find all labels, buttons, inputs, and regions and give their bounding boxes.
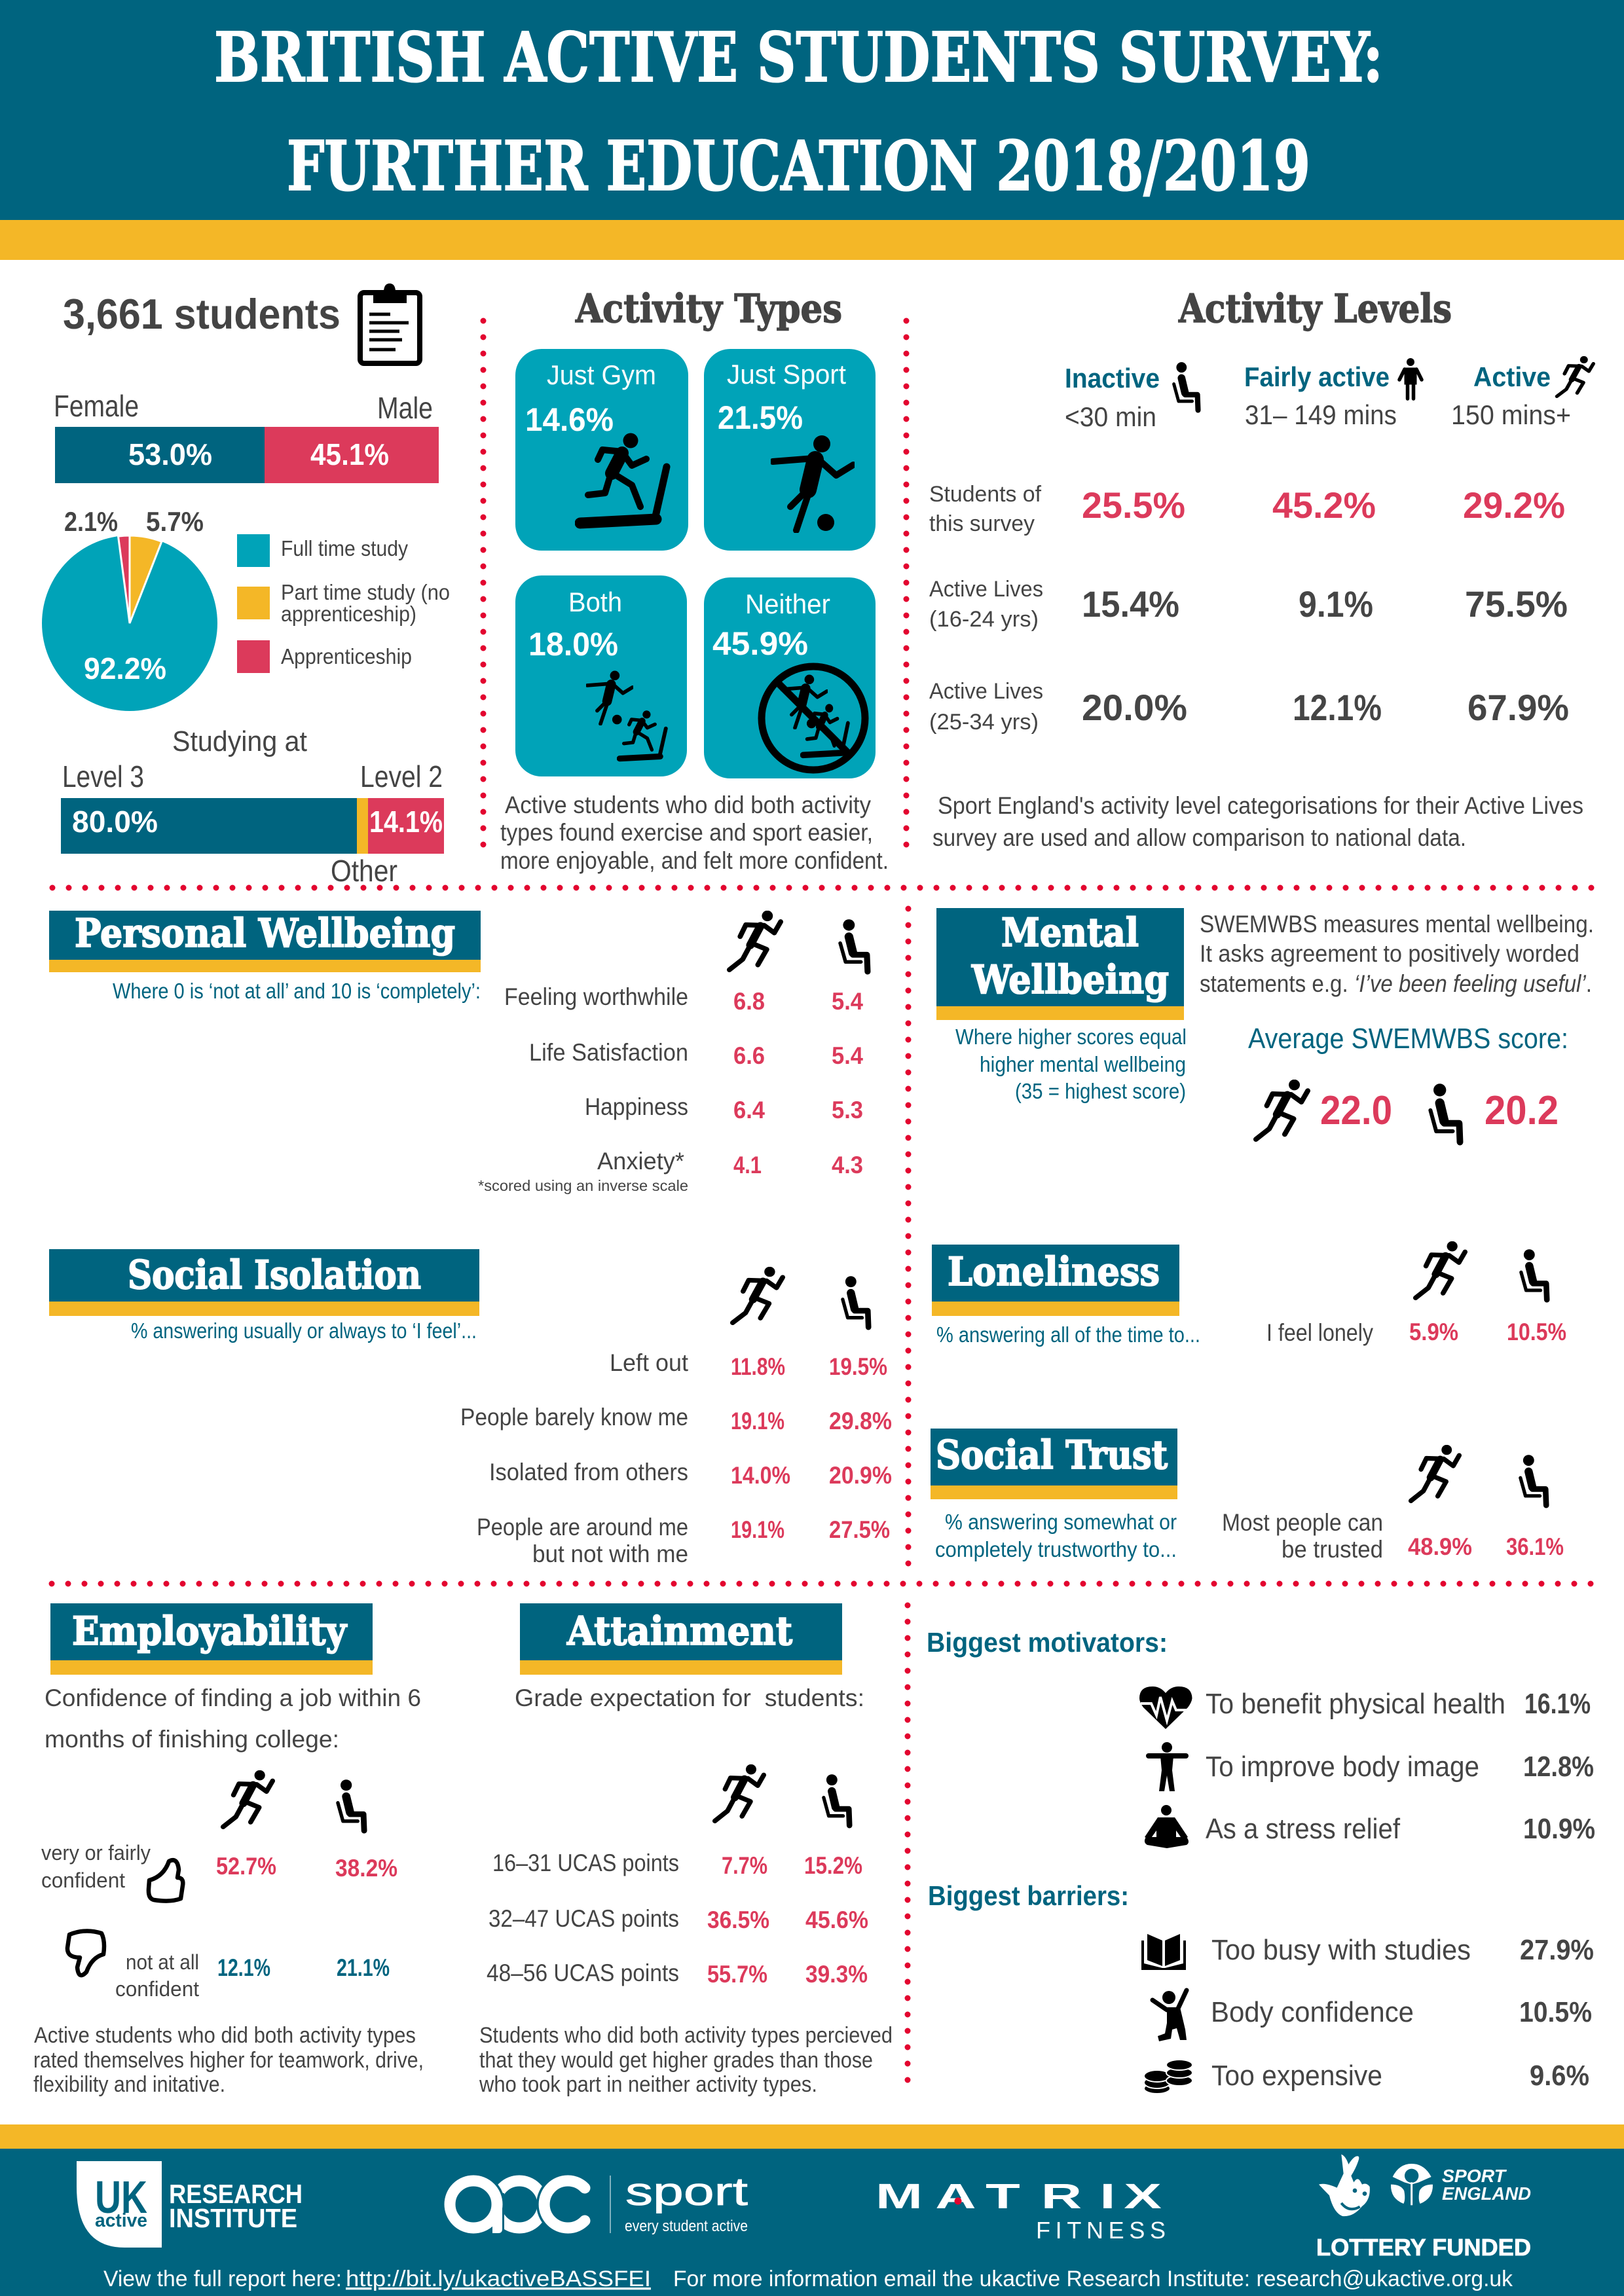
barrier: expense: 9.6% bbox=[1530, 2060, 1589, 2092]
icons and values: Most people can bbox=[1222, 1509, 1383, 1536]
title: FURTHER EDUCATION 2018/2019 bbox=[287, 126, 1310, 206]
motivator: stress relief: 10.9% bbox=[1523, 1813, 1595, 1845]
level labels: Other bbox=[331, 854, 397, 888]
question text: Confidence of finding a job within 6 bbox=[45, 1685, 421, 1711]
heading: biggest barriers: Biggest barriers: bbox=[928, 1880, 1129, 1911]
rows: 39.3% bbox=[805, 1961, 868, 1988]
icon: inactive bbox=[338, 1779, 364, 1831]
heading: social isolation: Social Isolation bbox=[128, 1252, 421, 1298]
card: just gym: Just Gym bbox=[547, 359, 656, 390]
icon: active bbox=[733, 1267, 783, 1322]
panel: activity types bbox=[500, 286, 889, 874]
barrier: body confidence: Body confidence bbox=[1211, 1996, 1414, 2028]
pie legend: Part time study (no bbox=[281, 580, 450, 604]
motivator: stress relief bbox=[1145, 1805, 1595, 1848]
subheading bbox=[935, 1510, 1177, 1561]
motivator: body image: 12.8% bbox=[1523, 1751, 1594, 1783]
heading: employability: Employability bbox=[72, 1609, 348, 1654]
rows: Feeling worthwhile bbox=[504, 983, 688, 1010]
row: active lives 16-24: Active Lives bbox=[929, 577, 1043, 602]
row: active lives 25-34: 12.1% bbox=[1293, 687, 1382, 728]
heading: biggest motivators: Biggest motivators: bbox=[927, 1627, 1168, 1658]
pie legend: apprenticeship) bbox=[281, 602, 416, 626]
activity levels note: Sport England's activity level categorisations for their Active Lives bbox=[938, 792, 1583, 819]
rows: Isolated from others bbox=[489, 1459, 688, 1485]
barrier: studies: Too busy with studies bbox=[1211, 1934, 1471, 1966]
panel: social isolation bbox=[49, 1249, 892, 1567]
logo: matrix fitness: FITNESS bbox=[1036, 2217, 1166, 2244]
heading: social isolation bbox=[49, 1249, 479, 1316]
level bar: 80.0% bbox=[72, 805, 158, 839]
row: active lives 16-24: (16-24 yrs) bbox=[929, 607, 1039, 632]
row: active lives 25-34: 67.9% bbox=[1467, 687, 1569, 728]
column: fairly active: Fairly active bbox=[1244, 361, 1390, 392]
rows: People are around me bbox=[477, 1514, 688, 1540]
heading: mental wellbeing bbox=[936, 908, 1184, 1020]
logo: aoc sport: sport bbox=[625, 2170, 748, 2214]
rows: 15.2% bbox=[804, 1852, 862, 1879]
logo: matrix fitness bbox=[876, 2177, 1166, 2244]
subheading: Where 0 is ‘not at all’ and 10 is ‘completely’: bbox=[113, 979, 481, 1003]
heading: loneliness bbox=[932, 1245, 1179, 1316]
logo: ukactive research institute: active bbox=[95, 2210, 147, 2231]
row: not confident: 21.1% bbox=[337, 1954, 390, 1981]
rows: but not with me bbox=[532, 1540, 688, 1567]
gender labels bbox=[54, 389, 433, 425]
attainment note: who took part in neither activity types. bbox=[479, 2072, 817, 2097]
rows: 36.5% bbox=[707, 1906, 769, 1933]
rows: 19.1% bbox=[731, 1408, 784, 1434]
barrier: body confidence bbox=[1153, 1990, 1592, 2041]
logo: matrix fitness: MATRIX bbox=[876, 2177, 1162, 2216]
rows: 6.4 bbox=[733, 1097, 765, 1123]
icons and values: 5.9% bbox=[1409, 1319, 1458, 1345]
activity types note: types found exercise and sport easier, bbox=[500, 819, 873, 846]
rows: 29.8% bbox=[829, 1408, 892, 1434]
row: confident: 52.7% bbox=[216, 1853, 276, 1880]
average scores bbox=[1256, 1080, 1559, 1142]
card: both: 18.0% bbox=[528, 626, 618, 663]
employability note bbox=[33, 2023, 424, 2097]
card: just sport: 21.5% bbox=[718, 399, 803, 436]
logo: sport england: SPORT bbox=[1442, 2166, 1507, 2186]
activity types note bbox=[500, 792, 889, 874]
heading: personal wellbeing: Personal Wellbeing bbox=[75, 911, 455, 957]
heading: 3,661 students: 3,661 students bbox=[63, 290, 341, 338]
panel: mental wellbeing bbox=[936, 908, 1594, 1142]
card: both: Both bbox=[568, 587, 622, 617]
row: active lives 25-34: (25-34 yrs) bbox=[929, 710, 1039, 735]
row: students of this survey: this survey bbox=[929, 511, 1035, 536]
rows: 6.6 bbox=[733, 1042, 765, 1069]
row: confident: 38.2% bbox=[335, 1855, 397, 1882]
rows bbox=[487, 1850, 868, 1988]
logo: ukactive research institute bbox=[77, 2161, 303, 2248]
subheading: Where higher scores equal bbox=[955, 1025, 1187, 1049]
pie chart: study type bbox=[42, 506, 217, 711]
card: neither: Neither bbox=[745, 589, 830, 619]
column: active: Active bbox=[1473, 361, 1551, 392]
panel: activity levels bbox=[929, 286, 1593, 851]
level bar bbox=[61, 798, 444, 854]
icons and values bbox=[1266, 1241, 1566, 1346]
rows bbox=[478, 983, 863, 1194]
panel: employability bbox=[33, 1603, 424, 2097]
column: fairly active: 31– 149 mins bbox=[1245, 399, 1397, 430]
barrier: studies: 27.9% bbox=[1520, 1934, 1594, 1966]
column: active bbox=[1451, 356, 1593, 430]
card: neither bbox=[704, 577, 876, 778]
subheading bbox=[955, 1025, 1187, 1103]
rows: Life Satisfaction bbox=[529, 1039, 688, 1066]
rows: 5.4 bbox=[832, 1042, 863, 1069]
panel: motivators and barriers bbox=[927, 1627, 1595, 2094]
card: neither: 45.9% bbox=[712, 625, 808, 662]
subheading: higher mental wellbeing bbox=[980, 1052, 1186, 1076]
row: students of this survey bbox=[929, 482, 1565, 536]
dotted separators bbox=[52, 321, 1598, 2095]
gender bar bbox=[55, 427, 439, 483]
activity levels note bbox=[932, 792, 1583, 851]
rows: 20.9% bbox=[829, 1462, 892, 1489]
barrier: expense bbox=[1144, 2060, 1589, 2094]
row: students of this survey: 25.5% bbox=[1082, 484, 1185, 526]
row: students of this survey: 45.2% bbox=[1272, 484, 1376, 526]
logo: aoc sport: every student active bbox=[625, 2217, 748, 2235]
rows: 55.7% bbox=[707, 1961, 767, 1988]
average scores: 22.0 bbox=[1320, 1088, 1392, 1133]
card: just sport bbox=[704, 349, 876, 551]
rows: 19.5% bbox=[829, 1353, 887, 1380]
logo: ukactive research institute: RESEARCH bbox=[169, 2179, 303, 2209]
subheading: % answering all of the time to... bbox=[936, 1322, 1200, 1347]
heading: mental wellbeing: Mental bbox=[1001, 910, 1139, 956]
logo: national lottery hand bbox=[1319, 2155, 1370, 2216]
rows: Anxiety* bbox=[597, 1148, 684, 1175]
panel: attainment bbox=[479, 1603, 893, 2097]
activity levels note: survey are used and allow comparison to national data. bbox=[932, 824, 1466, 851]
footer links: View the full report here: bbox=[103, 2267, 342, 2291]
row: active lives 25-34 bbox=[929, 679, 1569, 735]
logo: aoc sport bbox=[450, 2170, 748, 2235]
gender labels: Male bbox=[377, 391, 433, 425]
employability note: Active students who did both activity types bbox=[34, 2023, 416, 2048]
heading: loneliness: Loneliness bbox=[948, 1249, 1160, 1295]
card: just gym: 14.6% bbox=[525, 401, 614, 438]
rows: 5.3 bbox=[832, 1097, 863, 1123]
row: students of this survey: Students of bbox=[929, 482, 1042, 507]
title bbox=[214, 17, 1383, 206]
footer links: http://bit.ly/ukactiveBASSFEI bbox=[346, 2267, 651, 2291]
panel: social trust bbox=[931, 1429, 1564, 1563]
pie chart: study type: 92.2% bbox=[84, 651, 166, 685]
logo: ukactive research institute: INSTITUTE bbox=[169, 2203, 297, 2233]
icon: active bbox=[729, 911, 781, 970]
row: students of this survey: 29.2% bbox=[1463, 484, 1565, 526]
rows: Happiness bbox=[585, 1093, 688, 1120]
card: both bbox=[515, 575, 687, 776]
attainment note: that they would get higher grades than those bbox=[479, 2048, 873, 2073]
attainment note: Students who did both activity types percieved bbox=[479, 2023, 893, 2048]
logo: sport england bbox=[1391, 2164, 1531, 2205]
SWEMWBS description bbox=[1200, 911, 1594, 997]
column: fairly active bbox=[1244, 358, 1422, 430]
panel: student demographics bbox=[42, 283, 450, 888]
pie chart: study type: 2.1% bbox=[64, 506, 118, 537]
pie legend bbox=[237, 534, 450, 673]
pie legend: Full time study bbox=[281, 536, 408, 560]
heading: attainment bbox=[520, 1603, 842, 1675]
rows: 7.7% bbox=[722, 1852, 767, 1879]
barrier: body confidence: 10.5% bbox=[1519, 1996, 1592, 2028]
rows: People barely know me bbox=[460, 1404, 688, 1430]
row: active lives 16-24: 15.4% bbox=[1082, 583, 1179, 625]
row: active lives 25-34: 20.0% bbox=[1082, 687, 1187, 728]
gender bar: 53.0% bbox=[128, 437, 212, 471]
icons and values: 48.9% bbox=[1408, 1533, 1472, 1560]
rows: 4.1 bbox=[733, 1152, 762, 1178]
panel: personal wellbeing bbox=[49, 911, 868, 1194]
motivator: physical health: To benefit physical health bbox=[1206, 1688, 1505, 1720]
SWEMWBS description: statements e.g. ‘I’ve been feeling useful’. bbox=[1200, 970, 1592, 997]
level labels bbox=[62, 759, 443, 888]
barrier: studies bbox=[1141, 1934, 1594, 1970]
rows: 32–47 UCAS points bbox=[489, 1905, 679, 1932]
question text bbox=[45, 1685, 421, 1753]
level labels: Level 3 bbox=[62, 759, 144, 793]
subheading: % answering somewhat or bbox=[945, 1510, 1177, 1534]
row: not confident: confident bbox=[115, 1977, 199, 2001]
heading: studying at: Studying at bbox=[172, 725, 307, 757]
row: confident bbox=[41, 1841, 397, 1901]
rows: *scored using an inverse scale bbox=[478, 1177, 688, 1194]
activity types note: Active students who did both activity bbox=[505, 792, 871, 818]
logo: ukactive research institute: UK bbox=[95, 2172, 147, 2223]
column: inactive: Inactive bbox=[1065, 363, 1160, 393]
subheading: % answering usually or always to ‘I feel’... bbox=[131, 1319, 477, 1343]
card: just sport: Just Sport bbox=[727, 359, 846, 390]
motivator: physical health bbox=[1139, 1686, 1591, 1729]
barrier: expense: Too expensive bbox=[1211, 2060, 1382, 2092]
rows: 6.8 bbox=[733, 988, 765, 1015]
rows: 14.0% bbox=[731, 1462, 790, 1489]
heading: social trust bbox=[931, 1429, 1177, 1499]
average scores: 20.2 bbox=[1485, 1088, 1559, 1133]
gender labels: Female bbox=[54, 389, 139, 423]
footer links bbox=[103, 2267, 1513, 2291]
attainment note bbox=[479, 2023, 893, 2097]
heading: personal wellbeing bbox=[49, 911, 481, 972]
icons and values: be trusted bbox=[1282, 1536, 1383, 1563]
gender bar: 45.1% bbox=[310, 437, 389, 471]
panel: loneliness bbox=[932, 1241, 1566, 1347]
heading: activity types: Activity Types bbox=[575, 286, 842, 332]
footer bbox=[0, 2124, 1624, 2296]
rows: 19.1% bbox=[731, 1516, 784, 1543]
row: confident: very or fairly bbox=[41, 1841, 151, 1865]
pie chart: study type: 5.7% bbox=[146, 506, 204, 537]
icon: inactive bbox=[843, 1276, 868, 1327]
icon: inactive bbox=[824, 1774, 849, 1825]
SWEMWBS description: It asks agreement to positively worded bbox=[1200, 940, 1579, 967]
heading: activity levels: Activity Levels bbox=[1178, 286, 1452, 332]
rows: 4.3 bbox=[832, 1152, 863, 1178]
icon: active bbox=[715, 1764, 764, 1821]
rows: 5.4 bbox=[832, 988, 863, 1015]
subheading: (35 = highest score) bbox=[1015, 1079, 1186, 1103]
heading: mental wellbeing: Wellbeing bbox=[971, 957, 1169, 1003]
row: active lives 16-24 bbox=[929, 577, 1568, 632]
header banner bbox=[0, 0, 1624, 260]
heading: attainment: Attainment bbox=[566, 1609, 792, 1654]
activity types note: more enjoyable, and felt more confident. bbox=[500, 847, 889, 874]
lottery funded: LOTTERY FUNDED bbox=[1316, 2234, 1531, 2261]
rows: 11.8% bbox=[731, 1353, 785, 1380]
motivator: body image bbox=[1149, 1742, 1594, 1791]
question text: Grade expectation for students: bbox=[515, 1685, 864, 1711]
card: just gym bbox=[515, 349, 688, 551]
footer links: For more information email the ukactive Research Institute: research@ukactive.org.uk bbox=[673, 2267, 1513, 2291]
motivator: physical health: 16.1% bbox=[1524, 1688, 1591, 1720]
question text: months of finishing college: bbox=[45, 1726, 339, 1753]
employability note: rated themselves higher for teamwork, drive, bbox=[33, 2048, 424, 2073]
row: active lives 16-24: 9.1% bbox=[1299, 583, 1373, 625]
employability note: flexibility and initative. bbox=[33, 2072, 225, 2097]
rows: 48–56 UCAS points bbox=[487, 1959, 679, 1986]
rows: 16–31 UCAS points bbox=[492, 1850, 679, 1876]
heading: employability bbox=[50, 1603, 373, 1675]
column: inactive: <30 min bbox=[1065, 401, 1156, 432]
logo: sport england: ENGLAND bbox=[1442, 2183, 1531, 2204]
icon: inactive bbox=[840, 919, 868, 972]
average score heading: Average SWEMWBS score: bbox=[1248, 1023, 1568, 1055]
heading: social trust: Social Trust bbox=[936, 1432, 1168, 1478]
icon: clipboard bbox=[360, 283, 420, 363]
motivator: stress relief: As a stress relief bbox=[1206, 1813, 1401, 1845]
icons and values bbox=[1222, 1445, 1564, 1563]
icon: active bbox=[223, 1770, 272, 1827]
pie legend: Apprenticeship bbox=[281, 644, 412, 668]
level labels: Level 2 bbox=[360, 759, 443, 793]
subheading: completely trustworthy to... bbox=[935, 1537, 1177, 1561]
row: active lives 25-34: Active Lives bbox=[929, 679, 1043, 704]
column: inactive bbox=[1065, 362, 1198, 432]
motivator: body image: To improve body image bbox=[1206, 1751, 1479, 1783]
icons and values: I feel lonely bbox=[1266, 1319, 1373, 1346]
rows: 27.5% bbox=[829, 1516, 890, 1543]
row: active lives 16-24: 75.5% bbox=[1465, 583, 1568, 625]
level bar: 14.1% bbox=[369, 805, 443, 839]
icons and values: 36.1% bbox=[1506, 1533, 1564, 1560]
column: active: 150 mins+ bbox=[1451, 399, 1571, 430]
row: confident: confident bbox=[41, 1868, 125, 1892]
row: not confident: 12.1% bbox=[217, 1954, 270, 1981]
rows: 45.6% bbox=[805, 1906, 868, 1933]
rows bbox=[460, 1349, 892, 1567]
rows: Left out bbox=[610, 1349, 689, 1376]
icons and values: 10.5% bbox=[1507, 1319, 1566, 1345]
row: not confident bbox=[67, 1931, 390, 2001]
row: not confident: not at all bbox=[126, 1950, 199, 1974]
